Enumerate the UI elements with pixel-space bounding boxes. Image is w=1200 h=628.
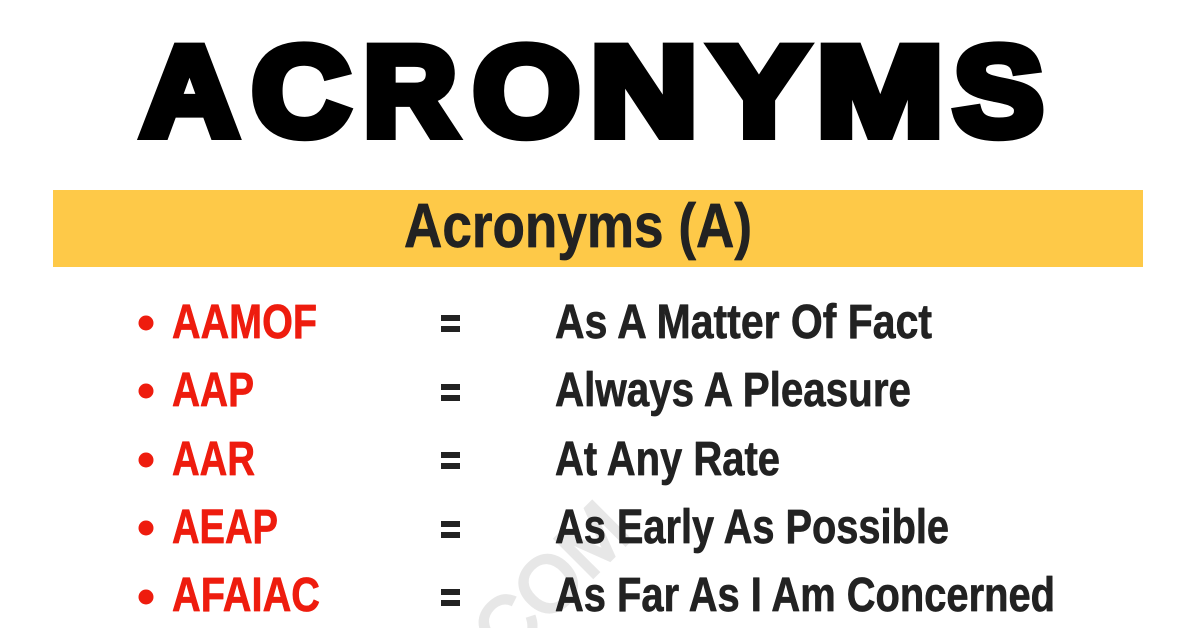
row: AAMOF: AAMOF xyxy=(172,296,317,349)
row: AAP: AAP xyxy=(172,364,254,417)
title: N xyxy=(590,21,698,163)
row: AAP xyxy=(138,364,911,417)
row: AFAIAC: AFAIAC xyxy=(172,569,320,622)
row: AAMOF xyxy=(138,296,932,349)
row: AAMOF: As A Matter Of Fact xyxy=(555,296,932,349)
row: AAR xyxy=(138,433,780,486)
row: AFAIAC: As Far As I Am Concerned xyxy=(555,569,1055,622)
title xyxy=(141,20,1043,163)
row: AAR: AAR xyxy=(172,433,255,486)
title: A xyxy=(141,20,238,162)
heading band: Acronyms (A) xyxy=(404,192,752,261)
row: AAP: Always A Pleasure xyxy=(555,364,911,417)
acronym list xyxy=(138,296,1055,622)
row: AFAIAC xyxy=(138,569,1055,622)
title: M xyxy=(817,20,943,162)
row: AAR: At Any Rate xyxy=(555,433,780,486)
row: AEAP: AEAP xyxy=(172,501,278,554)
title: S xyxy=(954,20,1043,162)
row: AEAP xyxy=(138,501,949,554)
title: O xyxy=(473,21,580,163)
heading band xyxy=(53,190,1143,267)
title: Y xyxy=(711,20,807,162)
row: AEAP: As Early As Possible xyxy=(555,501,949,554)
title: C xyxy=(252,20,350,162)
title: R xyxy=(363,21,457,163)
